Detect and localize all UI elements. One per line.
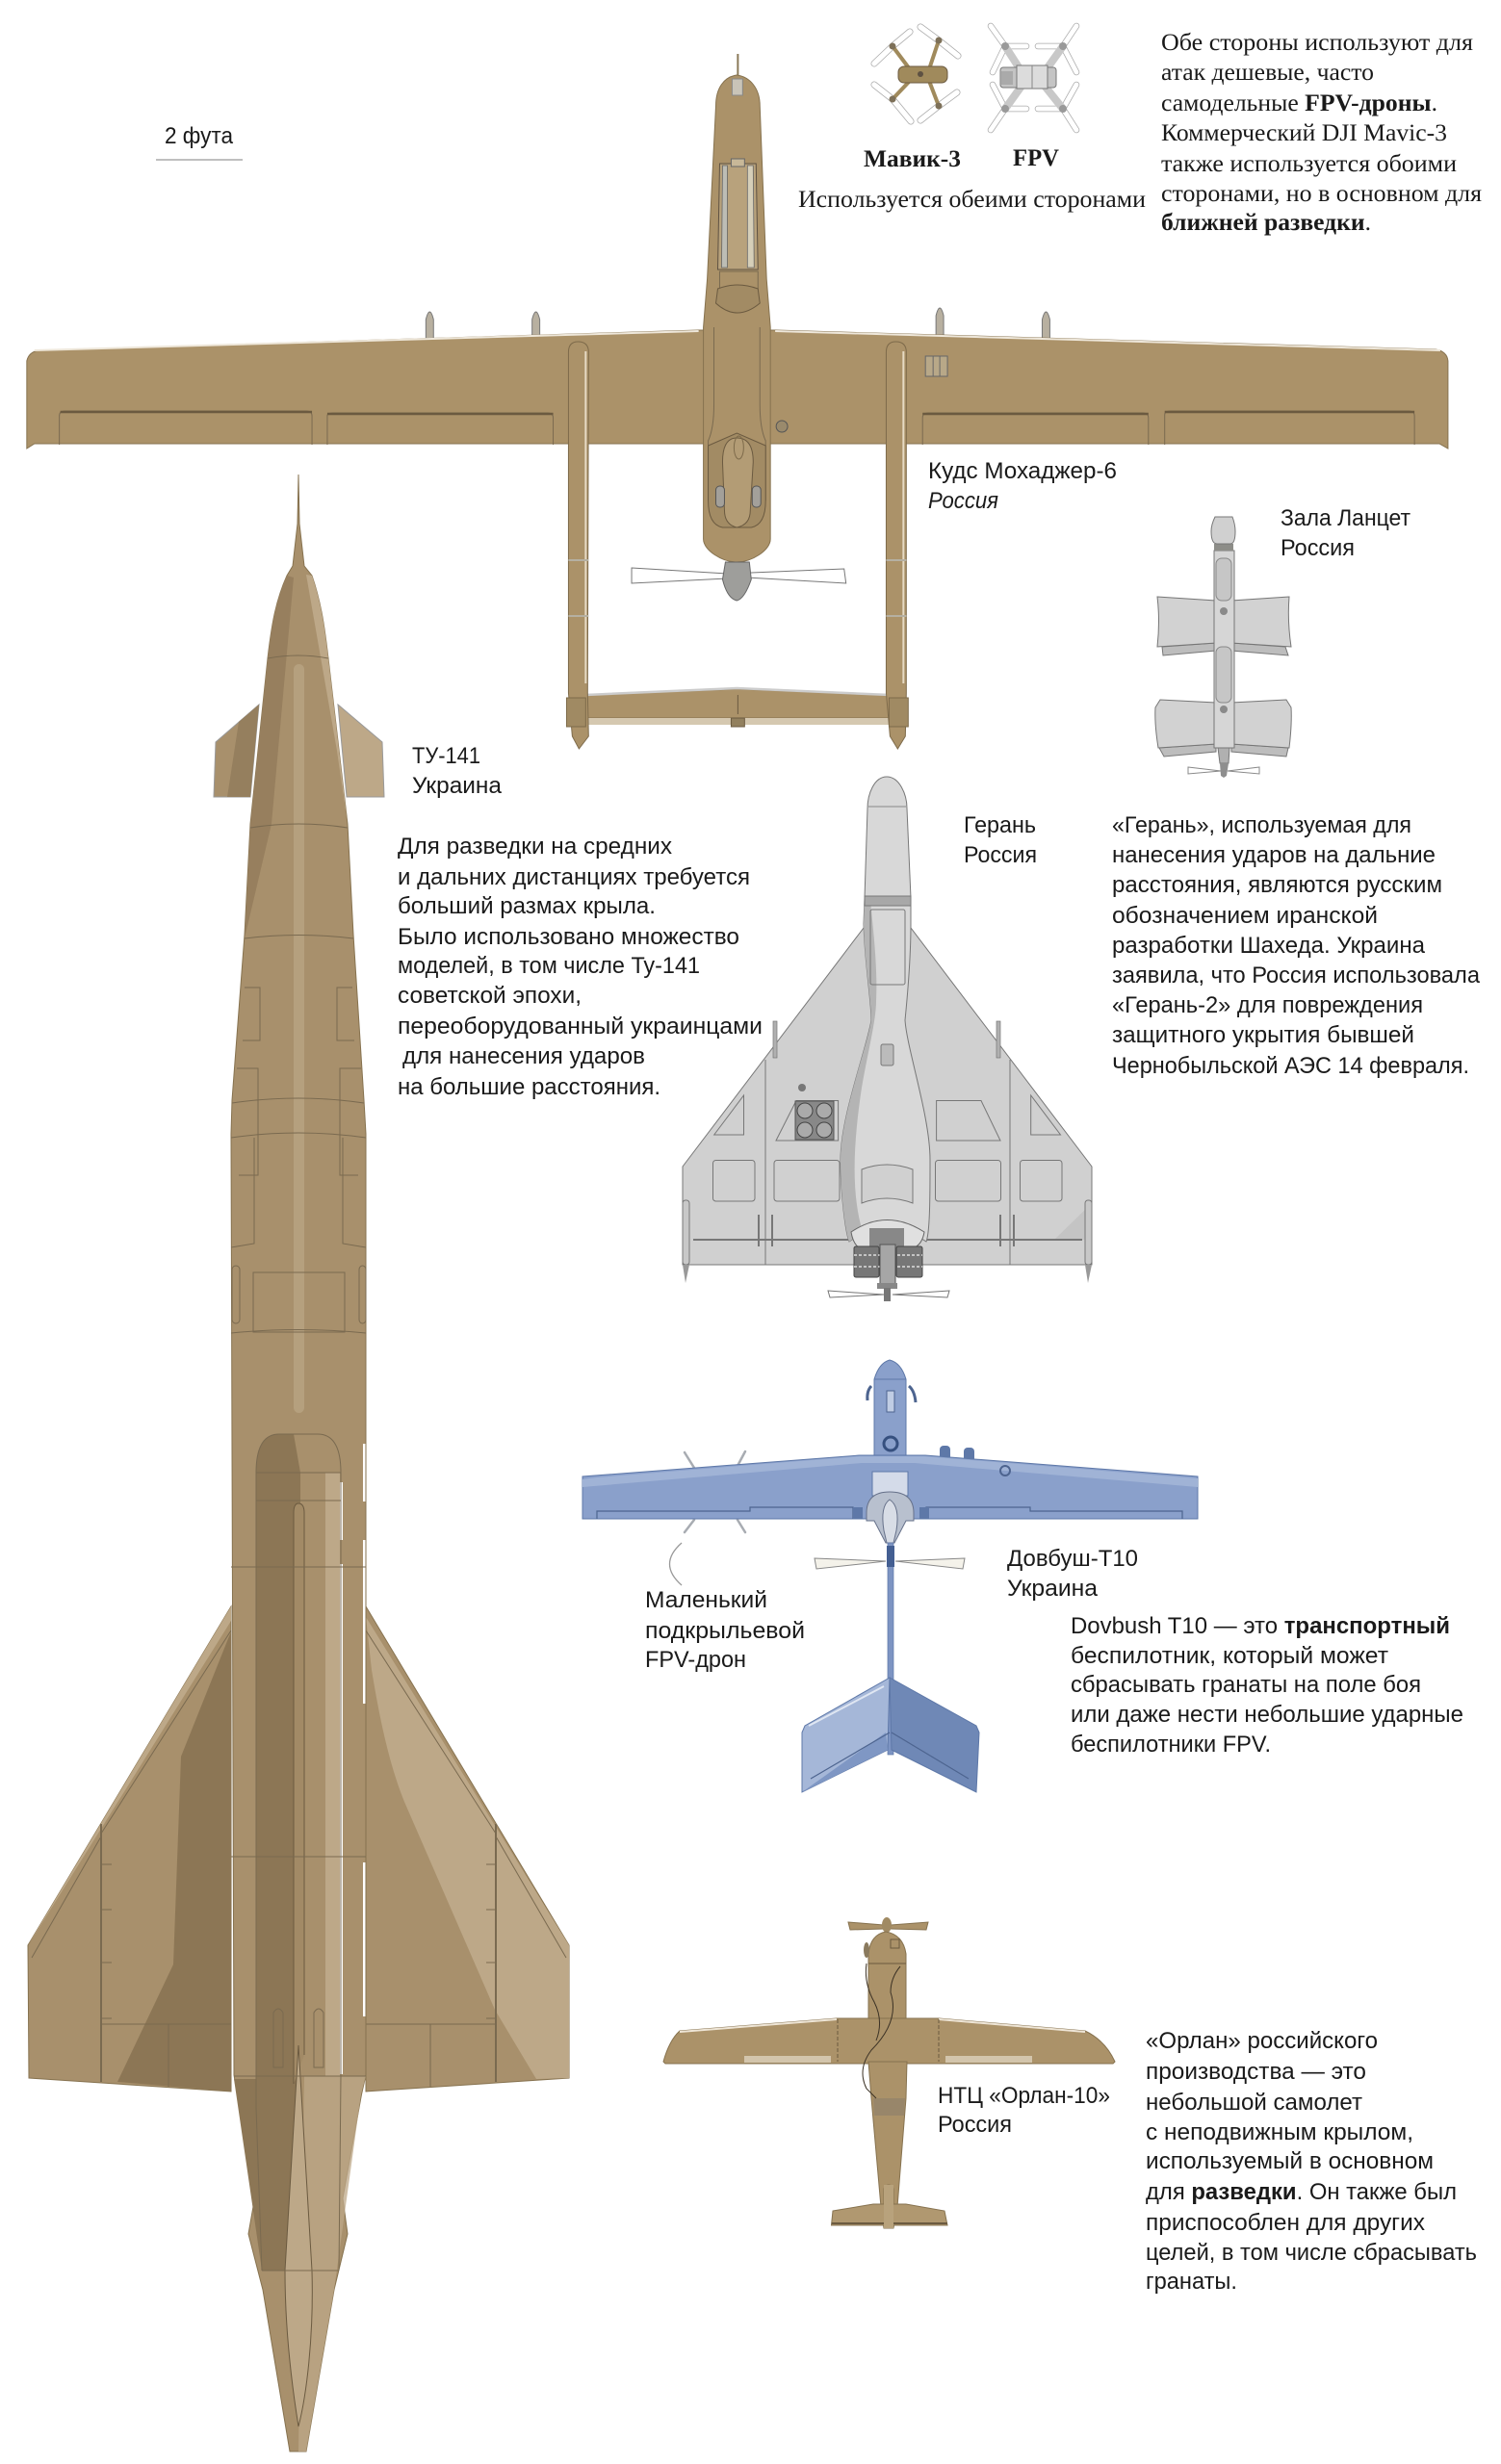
text block: FPV drones: Коммерческий DJI Mavic-3 (1161, 120, 1447, 146)
text block: FPV drones: ближней разведки. (1161, 210, 1371, 236)
text block: Dovbush T10: Dovbush T10 — это транспортный (1071, 1613, 1450, 1639)
text block: Tu-141: для нанесения ударов (402, 1043, 645, 1069)
label: Zala Lancet: Зала Ланцет (1281, 505, 1410, 531)
drone: Tu-141 (28, 475, 569, 2451)
label: Zala Lancet (1281, 505, 1410, 561)
label: Dovbush T10: Украина (1007, 1576, 1099, 1602)
drone: Geran / Shahed (683, 777, 1092, 1301)
label: used by both sides: Используется обеими сторонами (798, 187, 1146, 213)
text block: FPV drones: самодельные FPV-дроны. (1161, 90, 1437, 116)
label: Dovbush T10: Довбуш-Т10 (1007, 1546, 1138, 1572)
text block: Tu-141: Для разведки на средних (398, 834, 672, 860)
label: FPV: FPV (1013, 145, 1059, 171)
drone: Zala Lancet (1155, 517, 1291, 778)
text block: Geran: нанесения ударов на дальние (1112, 842, 1436, 868)
text block: Geran: «Герань-2» для повреждения (1112, 992, 1423, 1018)
text block: Orlan-10: небольшой самолет (1146, 2090, 1362, 2116)
label: small underwing FPV drone: Маленький (645, 1587, 767, 1613)
scale bar: 2 feet: 2 фута (165, 123, 234, 149)
text block: Orlan-10: с неподвижным крылом, (1146, 2119, 1413, 2145)
text block: Geran: заявила, что Россия использовала (1112, 962, 1481, 988)
text block: Dovbush T10: беспилотник, который может (1071, 1643, 1388, 1669)
label: small underwing FPV drone: FPV-дрон (645, 1647, 746, 1673)
scale bar: 2 feet (156, 123, 243, 160)
label: Orlan-10: Россия (938, 2112, 1012, 2138)
text block: Tu-141: моделей, в том числе Ту-141 (398, 953, 700, 979)
text block: Orlan-10: гранаты. (1146, 2269, 1237, 2295)
label: small underwing FPV drone: подкрыльевой (645, 1618, 805, 1644)
text block: Orlan-10: производства — это (1146, 2059, 1366, 2085)
label: Zala Lancet: Россия (1281, 535, 1355, 561)
label: Mohajer-6 (928, 458, 1117, 514)
label: Geran: Россия (964, 842, 1037, 868)
text block: Geran (1112, 812, 1481, 1079)
label: Geran (964, 812, 1037, 868)
text block: Orlan-10: целей, в том числе сбрасывать (1146, 2240, 1477, 2266)
text block: Tu-141: на большие расстояния. (398, 1074, 660, 1100)
label: Tu-141: ТУ-141 (412, 743, 480, 769)
text block: Geran: обозначением иранской (1112, 903, 1378, 929)
text block: Orlan-10: приспособлен для других (1146, 2210, 1425, 2236)
label: small underwing FPV drone (645, 1587, 805, 1673)
label: Dovbush T10 (1007, 1546, 1138, 1602)
arrow: to small FPV drone (670, 1543, 682, 1585)
text block: Geran: расстояния, являются русским (1112, 872, 1442, 898)
text block: Dovbush T10 (1071, 1613, 1463, 1758)
text block: Tu-141 (398, 834, 763, 1100)
label: Tu-141: Украина (412, 773, 503, 799)
text block: FPV drones: сторонами, но в основном для (1161, 181, 1483, 207)
text block: Orlan-10: для разведки. Он также был (1146, 2179, 1457, 2205)
text block: Geran: Чернобыльской АЭС 14 февраля. (1112, 1053, 1469, 1079)
label: Mavic-3: Мавик-3 (864, 146, 961, 172)
icon: FPV quadcopter (991, 26, 1076, 130)
label: Geran: Герань (964, 812, 1036, 838)
text block: Tu-141: больший размах крыла. (398, 893, 656, 919)
label: Tu-141 (412, 743, 503, 799)
drone: Dovbush T10 (582, 1360, 1198, 1792)
text block: FPV drones: атак дешевые, часто (1161, 60, 1374, 86)
text block: Orlan-10: «Орлан» российского (1146, 2028, 1378, 2054)
text block: Geran: защитного укрытия бывшей (1112, 1022, 1414, 1048)
text block: Orlan-10: используемый в основном (1146, 2148, 1434, 2174)
text block: Dovbush T10: беспилотники FPV. (1071, 1732, 1271, 1758)
label: Orlan-10 (938, 2083, 1110, 2138)
icon: Mavic-3 quadcopter (874, 27, 958, 121)
text block: Tu-141: советской эпохи, (398, 983, 582, 1009)
text block: FPV drones: Обе стороны используют для (1161, 30, 1474, 56)
text block: Tu-141: и дальних дистанциях требуется (398, 864, 750, 890)
text block: Tu-141: Было использовано множество (398, 924, 739, 950)
text block: FPV drones (1161, 30, 1483, 236)
drone: Orlan-10 (663, 1917, 1115, 2228)
text block: FPV drones: также используется обоими (1161, 151, 1457, 177)
label: Mohajer-6: Кудс Мохаджер-6 (928, 458, 1117, 484)
text block: Orlan-10 (1146, 2028, 1477, 2295)
text block: Geran: «Герань», используемая для (1112, 812, 1411, 838)
label: Orlan-10: НТЦ «Орлан-10» (938, 2083, 1110, 2109)
text block: Tu-141: переоборудованный украинцами (398, 1014, 763, 1040)
label: Mohajer-6: Россия (928, 488, 998, 514)
text block: Dovbush T10: сбрасывать гранаты на поле боя (1071, 1672, 1421, 1698)
drone: Mohajer-6 (27, 54, 1448, 749)
text block: Dovbush T10: или даже нести небольшие ударные (1071, 1702, 1463, 1728)
text block: Geran: разработки Шахеда. Украина (1112, 933, 1426, 959)
